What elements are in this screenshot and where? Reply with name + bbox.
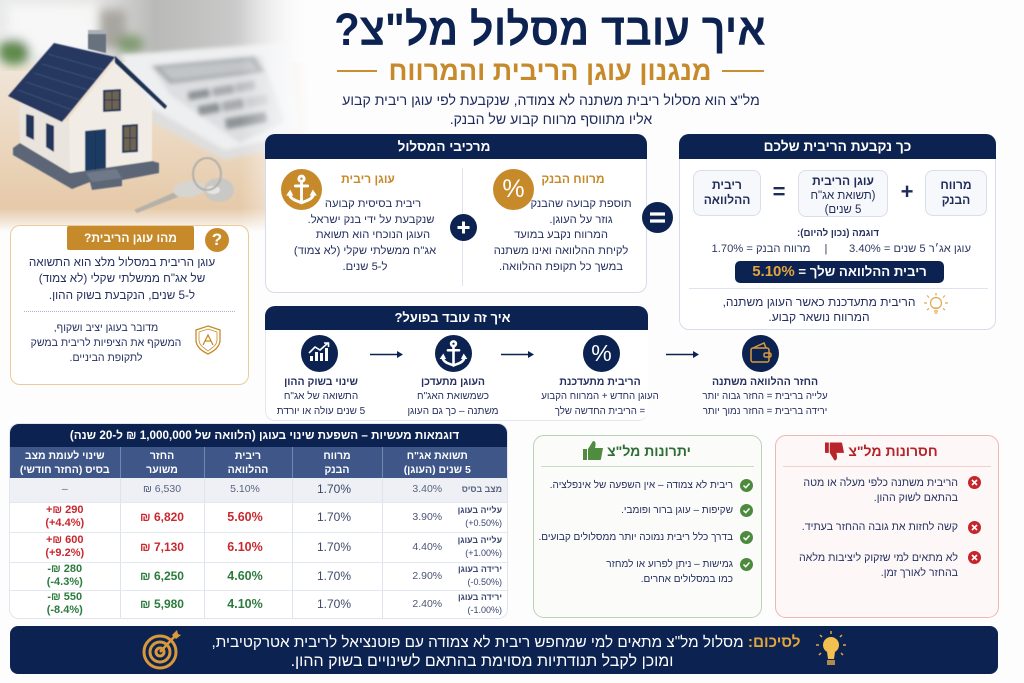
data table: (+0.50%) — [465, 518, 502, 528]
formula box: anchor: 5 שנים) — [825, 204, 861, 216]
text: definition: ל-5 שנים, הנקבעת בשוק ההון. — [49, 289, 195, 302]
note: הריבית מתעדכנת כאשר העוגן משתנה, — [723, 295, 915, 309]
note — [723, 295, 915, 324]
text: stable anchor note: המשקף את הציפיות לריבית במשק — [31, 337, 181, 349]
arrow — [666, 351, 699, 358]
icon: percent: % — [591, 340, 612, 366]
heading: components: מרכיבי המסלול — [398, 139, 490, 154]
data table: (+4.4%) — [45, 517, 84, 529]
step text: כשמשואת האג"ח — [417, 391, 489, 402]
advantage 2 — [621, 504, 753, 517]
step text: התשואה של אג"ח — [284, 391, 358, 402]
formula box: loan rate: ריבית — [712, 178, 742, 192]
icon: wallet — [742, 335, 779, 372]
text: bank margin description: המרווח נקבע במועד — [514, 229, 608, 241]
disadvantage text: הריבית משתנה כלפי מעלה או מטה — [803, 477, 958, 489]
disadvantage text: קשה לחזות את גובה ההחזר בעתיד. — [802, 521, 958, 533]
data table: (-4.3%) — [47, 576, 83, 588]
data table: – — [62, 483, 68, 495]
disadvantage 3 — [790, 551, 990, 581]
data table: 1.70% — [317, 510, 351, 524]
data table: ₪ 7,130 — [140, 540, 184, 554]
step text: שינוי בשוק ההון — [284, 376, 358, 388]
data table: (-8.4%) — [47, 604, 83, 616]
step text — [541, 376, 659, 417]
result pill: ריבית ההלוואה שלך = 5.10% — [752, 263, 927, 280]
heading: in practice: איך זה עובד בפועל? — [394, 310, 511, 325]
icon: percent — [493, 169, 534, 210]
component title: bank margin: מרווח הבנק — [541, 172, 605, 186]
text: bank margin description: גוזר על העוגן. — [549, 214, 613, 226]
icon: target — [141, 630, 181, 670]
icon: cross — [968, 476, 981, 489]
heading: rate — [679, 134, 996, 159]
data table — [10, 447, 507, 618]
summary text: ומוכן לקבל תנודתיות מסוימת בהתאם לשינויים בשוק ההון. — [291, 652, 673, 670]
text: bank margin description: במשך כל תקופת ההלוואה. — [499, 261, 623, 273]
intro text: אליו מתווסף מרווח קבוע של הבנק. — [450, 111, 652, 127]
icon: equals — [642, 202, 673, 233]
data table: 3.90% — [412, 510, 442, 522]
panel: route components — [265, 134, 647, 293]
badge heading — [67, 226, 194, 250]
step: capital market change — [277, 335, 365, 417]
step text: העוגן מתעדכן — [421, 376, 485, 388]
data table: עלייה בעוגן — [458, 505, 502, 515]
advantage text: כמו במסלולים אחרים. — [641, 574, 733, 585]
result pill — [735, 261, 944, 283]
data table: ריבית — [235, 450, 261, 462]
icon: percent: % — [502, 175, 525, 203]
advantage text: בדרך כלל ריבית נמוכה יותר ממסלולים קבועים. — [539, 532, 733, 543]
formula box: loan rate — [693, 170, 761, 216]
icon: shield — [195, 325, 221, 355]
summary text — [212, 632, 800, 670]
icon: cross — [968, 551, 981, 564]
icon: check — [740, 558, 753, 571]
step: rate updates — [541, 335, 659, 417]
example values — [712, 243, 971, 255]
formula box: anchor — [798, 170, 888, 217]
text: stable anchor note: מדובר בעוגן יציב ושקוף, — [54, 322, 158, 334]
data table: 5 שנים (העוגן) — [404, 464, 471, 476]
icon: anchor — [435, 335, 472, 372]
step text: = הריבית החדשה שלך — [555, 406, 645, 417]
data table: 5.10% — [230, 483, 260, 495]
step: payment changes — [702, 335, 828, 417]
icon: plus — [450, 214, 477, 241]
data table: 2.40% — [412, 598, 442, 610]
text: anchor description: אג"ח ממשלתי שקלי (לא צמוד) — [294, 245, 436, 257]
subtitle with side rules: מנגנון עוגן הריבית והמרווח — [389, 56, 711, 86]
icon: anchor — [281, 169, 322, 210]
data table: -₪ 550 — [47, 591, 82, 603]
text: anchor description — [294, 198, 436, 273]
data table: הבנק — [324, 464, 350, 476]
heading: components — [265, 134, 647, 159]
formula box: bank margin: מרווח — [940, 178, 972, 192]
data table: 2.90% — [412, 570, 442, 582]
data table: ₪ 6,250 — [140, 568, 184, 582]
text: stable anchor note — [31, 322, 181, 364]
note: המרווח נושאר קבוע. — [768, 310, 870, 324]
panel: what is the anchor — [10, 225, 249, 385]
data table: 5.60% — [227, 510, 263, 524]
text: anchor description: ריבית בסיסית קבועה — [325, 198, 421, 210]
step text: הריבית מתעדכנת — [559, 376, 641, 388]
text: stable anchor note: לתקופת הביניים. — [70, 352, 142, 364]
advantage 4 — [606, 558, 753, 585]
step text — [277, 376, 365, 417]
example values: עוגן אג׳ר 5 שנים = 3.40% — [849, 243, 971, 255]
heading: advantages: יתרונות מל"צ — [607, 443, 691, 459]
formula box: bank margin: הבנק — [942, 193, 970, 207]
heading: rate: כך נקבעת הריבית שלכם — [764, 139, 911, 154]
step text: ירידה בריבית = החזר נמוך יותר — [703, 406, 827, 417]
disadvantage 1 — [790, 476, 990, 506]
data table: החזר — [150, 450, 174, 462]
banner: summary — [10, 626, 998, 674]
step text — [407, 376, 499, 417]
icon: check — [740, 504, 753, 517]
data table: תשואת אג"ח — [407, 450, 468, 462]
data table: +₪ 290 — [46, 504, 84, 516]
icon: percent — [583, 335, 620, 372]
table heading: דוגמאות מעשיות – השפעת שינוי בעוגן (הלוואה של 1,000,000 ₪ ל-20 שנה) — [70, 429, 459, 442]
panel: practical examples table — [10, 424, 507, 618]
data table: ירידה בעוגן — [458, 592, 502, 602]
disadvantage text — [803, 476, 958, 506]
text: bank margin description: לקיחת ההלוואה ואינו משתנה — [494, 245, 628, 257]
data table: 1.70% — [317, 597, 351, 611]
text: definition — [29, 256, 215, 302]
badge heading: מהו עוגן הריבית? — [84, 231, 177, 245]
data table: בסיס (החזר חודשי) — [20, 464, 110, 476]
step text: 5 שנים עולה או יורדת — [277, 406, 365, 417]
summary text: לסיכום: מסלול מל"צ מתאים למי שמחפש ריבית לא צמודה עם פוטנציאל לריבית אטרקטיבית, — [212, 634, 800, 650]
text: definition: של אג"ח ממשלתי שקלי (לא צמוד) — [39, 272, 205, 285]
text: definition: עוגן הריבית במסלול מלצ הוא התשואה — [29, 256, 215, 269]
table heading — [10, 424, 507, 447]
icon: cross — [968, 521, 981, 534]
data table: ₪ 6,530 — [143, 483, 181, 495]
data table: 3.40% — [412, 483, 442, 495]
example heading: דוגמה (נכון להיום): — [797, 228, 879, 239]
data table: (-0.50%) — [468, 577, 502, 587]
step: anchor updates — [407, 335, 499, 417]
data table: 4.60% — [227, 568, 263, 582]
example values: | — [825, 243, 827, 255]
data table: ההלוואה — [228, 464, 268, 476]
arrow — [370, 351, 403, 358]
text: anchor description: העוגן הנוכחי הוא תשואת — [316, 229, 430, 241]
disadvantage text: בהחזר לאורך זמן. — [881, 567, 958, 579]
formula box: bank margin — [925, 170, 987, 216]
intro text — [342, 92, 760, 127]
data table: -₪ 280 — [47, 563, 82, 575]
heading: disadvantages: חסרונות מל"צ — [848, 443, 938, 459]
icon: check — [740, 531, 753, 544]
data table: 1.70% — [317, 482, 351, 496]
data table: 1.70% — [317, 540, 351, 554]
disadvantage 2 — [790, 520, 990, 535]
icon: glowing bulb — [815, 631, 847, 669]
data table: (-1.00%) — [468, 605, 502, 615]
data table: שינוי לעומת מצב — [25, 450, 105, 462]
title: איך עובד מסלול מל"צ? — [334, 4, 766, 55]
data table: 4.40% — [412, 540, 442, 552]
data table: מרווח — [323, 450, 351, 462]
icon: thumbs up — [583, 441, 603, 460]
data table: ₪ 5,980 — [140, 597, 184, 611]
disadvantage text: לא מתאים למי שזקוק ליציבות מלאה — [799, 552, 958, 564]
text: anchor description: שנקבעת על ידי בנק ישראל. — [308, 214, 434, 226]
heading: in practice — [265, 306, 648, 330]
advantage text: גמישות – ניתן לפרוע או למחזר — [606, 559, 733, 570]
panel: advantages — [533, 435, 762, 618]
formula box: anchor: (תשואת אג"ח — [810, 190, 876, 202]
icon: thumbs down — [825, 442, 844, 460]
icon: check — [740, 479, 753, 492]
advantage text: ריבית לא צמודה – אין השפעה של אינפלציה. — [550, 480, 733, 491]
step text: העוגן החדש + המרווח הקבוע — [541, 391, 659, 402]
data table: מצב בסיס — [462, 484, 502, 494]
intro text: מל"צ הוא מסלול ריבית משתנה לא צמודה, שנקבעת לפי עוגן ריבית קבוע — [342, 92, 760, 108]
formula operator: plus: + — [901, 179, 913, 204]
data table: 6.10% — [227, 540, 263, 554]
advantage 3 — [539, 531, 753, 544]
data table: 4.10% — [227, 597, 263, 611]
panel: disadvantages — [775, 435, 999, 618]
icon: question mark — [205, 228, 229, 252]
example values: מרווח הבנק = 1.70% — [712, 243, 810, 255]
data table: +₪ 600 — [46, 534, 84, 546]
panel: how it works in practice — [265, 306, 648, 421]
data table: משוער — [146, 464, 178, 476]
step text — [702, 376, 828, 417]
step text: משתנה – כך גם העוגן — [407, 406, 499, 417]
text: bank margin description — [494, 198, 632, 273]
data table: ₪ 6,820 — [140, 510, 184, 524]
advantage 1 — [550, 479, 753, 492]
disadvantage text: בהתאם לשוק ההון. — [874, 492, 958, 504]
disadvantage text — [799, 551, 958, 581]
formula operator: equals: = — [773, 179, 785, 204]
keys — [134, 192, 178, 213]
data table: (+9.2%) — [45, 547, 84, 559]
icon: question mark: ? — [212, 230, 222, 249]
formula box: anchor: עוגן הריבית — [812, 174, 874, 188]
advantage text: שקיפות – עוגן ברור ופומבי. — [621, 505, 733, 516]
component title: interest anchor: עוגן ריבית — [341, 172, 395, 186]
icon: light bulb — [924, 293, 948, 314]
text: bank margin description: תוספת קבועה שהבנק — [530, 198, 632, 210]
formula box: loan rate: ההלוואה — [704, 193, 750, 207]
photo: model house with keys and calculator — [0, 0, 300, 230]
data table: עלייה בעוגן — [458, 535, 502, 545]
step text: החזר ההלוואה משתנה — [712, 376, 818, 388]
data table: 1.70% — [317, 568, 351, 582]
step text: עלייה בריבית = החזר גבוה יותר — [702, 391, 828, 402]
arrow — [501, 351, 534, 358]
data table: (+1.00%) — [465, 548, 502, 558]
text: anchor description: ל-5 שנים. — [343, 261, 387, 273]
icon: rising chart — [301, 335, 338, 372]
panel: how your rate is set — [679, 134, 996, 330]
advantage text — [606, 558, 733, 585]
data table: ירידה בעוגן — [458, 564, 502, 574]
